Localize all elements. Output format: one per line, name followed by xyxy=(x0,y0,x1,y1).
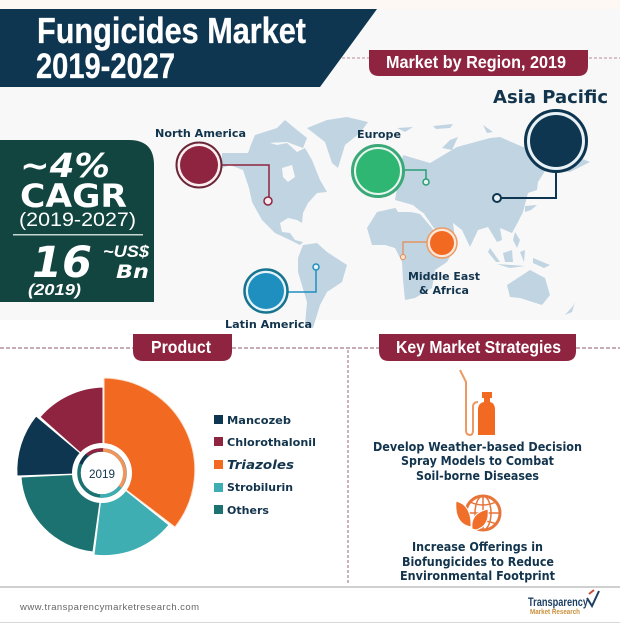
icon: sprayer xyxy=(460,370,495,435)
marker: Latin America: Latin America xyxy=(225,319,312,331)
title banner xyxy=(0,9,377,87)
chart: product pie xyxy=(17,378,195,556)
title banner: 2019-2027 xyxy=(36,47,175,86)
text: strategy two xyxy=(400,540,555,583)
heading: key market strategies xyxy=(379,334,576,361)
slice: Strobilurin xyxy=(94,473,169,556)
heading: market by region xyxy=(342,50,620,76)
marker: North America: North America xyxy=(155,128,246,140)
text: strategy one: Spray Models to Combat xyxy=(401,454,554,468)
icon: globe with leaves xyxy=(456,496,500,530)
panel: CAGR and market value: Bn xyxy=(116,261,149,283)
text: strategy one: Soil-borne Diseases xyxy=(416,469,539,483)
world map xyxy=(222,117,590,328)
panel: CAGR and market value: ~4% xyxy=(20,146,110,185)
slice: Others xyxy=(21,473,104,552)
panel: CAGR and market value: 16 xyxy=(32,238,92,288)
panel: CAGR and market value: (2019) xyxy=(28,282,81,299)
legend: Strobilurin xyxy=(227,481,293,494)
panel: CAGR and market value: (2019-2027) xyxy=(19,210,136,231)
legend: Mancozeb xyxy=(227,414,291,427)
text: strategy two: Biofungicides to Reduce xyxy=(402,555,554,569)
text: strategy one xyxy=(373,440,582,483)
slice: Mancozeb xyxy=(17,416,104,476)
marker: Asia Pacific: Asia Pacific xyxy=(493,88,608,108)
title banner: Fungicides Market xyxy=(37,10,306,51)
panel: CAGR and market value xyxy=(0,140,154,302)
marker: Asia Pacific xyxy=(493,88,608,202)
marker: North America xyxy=(155,128,272,205)
heading: product xyxy=(133,334,232,361)
legend: Others xyxy=(227,504,269,517)
marker: Middle East and Africa: & Africa xyxy=(419,285,469,297)
legend: Chlorothalonil xyxy=(227,436,316,449)
marker: Europe xyxy=(352,129,429,196)
text: strategy one: Develop Weather-based Decision xyxy=(373,440,582,454)
heading: key market strategies: Key Market Strategies xyxy=(396,337,561,357)
heading: product: Product xyxy=(151,337,211,357)
marker: Middle East and Africa: Middle East xyxy=(408,271,480,283)
marker: Latin America xyxy=(225,264,319,331)
panel: CAGR and market value: ~US$ xyxy=(103,242,150,261)
legend xyxy=(214,414,316,517)
text: strategy two: Environmental Footprint xyxy=(400,569,555,583)
heading: market by region: Market by Region, 2019 xyxy=(386,52,566,72)
marker: Europe: Europe xyxy=(357,129,401,141)
logo: Transparency Market Research: Market Research xyxy=(530,609,580,616)
logo: Transparency Market Research xyxy=(528,590,599,616)
slice: Chlorothalonil xyxy=(40,387,103,473)
footer url: www.transparencymarketresearch.com xyxy=(19,602,199,613)
legend: Triazoles xyxy=(227,457,294,472)
panel: CAGR and market value: CAGR xyxy=(20,177,127,215)
marker: Middle East and Africa xyxy=(400,228,480,297)
year hub xyxy=(72,443,132,503)
text: strategy two: Increase Offerings in xyxy=(412,540,543,554)
year hub: 2019 xyxy=(89,467,115,481)
slice: Triazoles xyxy=(104,378,195,527)
logo: Transparency Market Research: Transparency xyxy=(528,597,588,609)
